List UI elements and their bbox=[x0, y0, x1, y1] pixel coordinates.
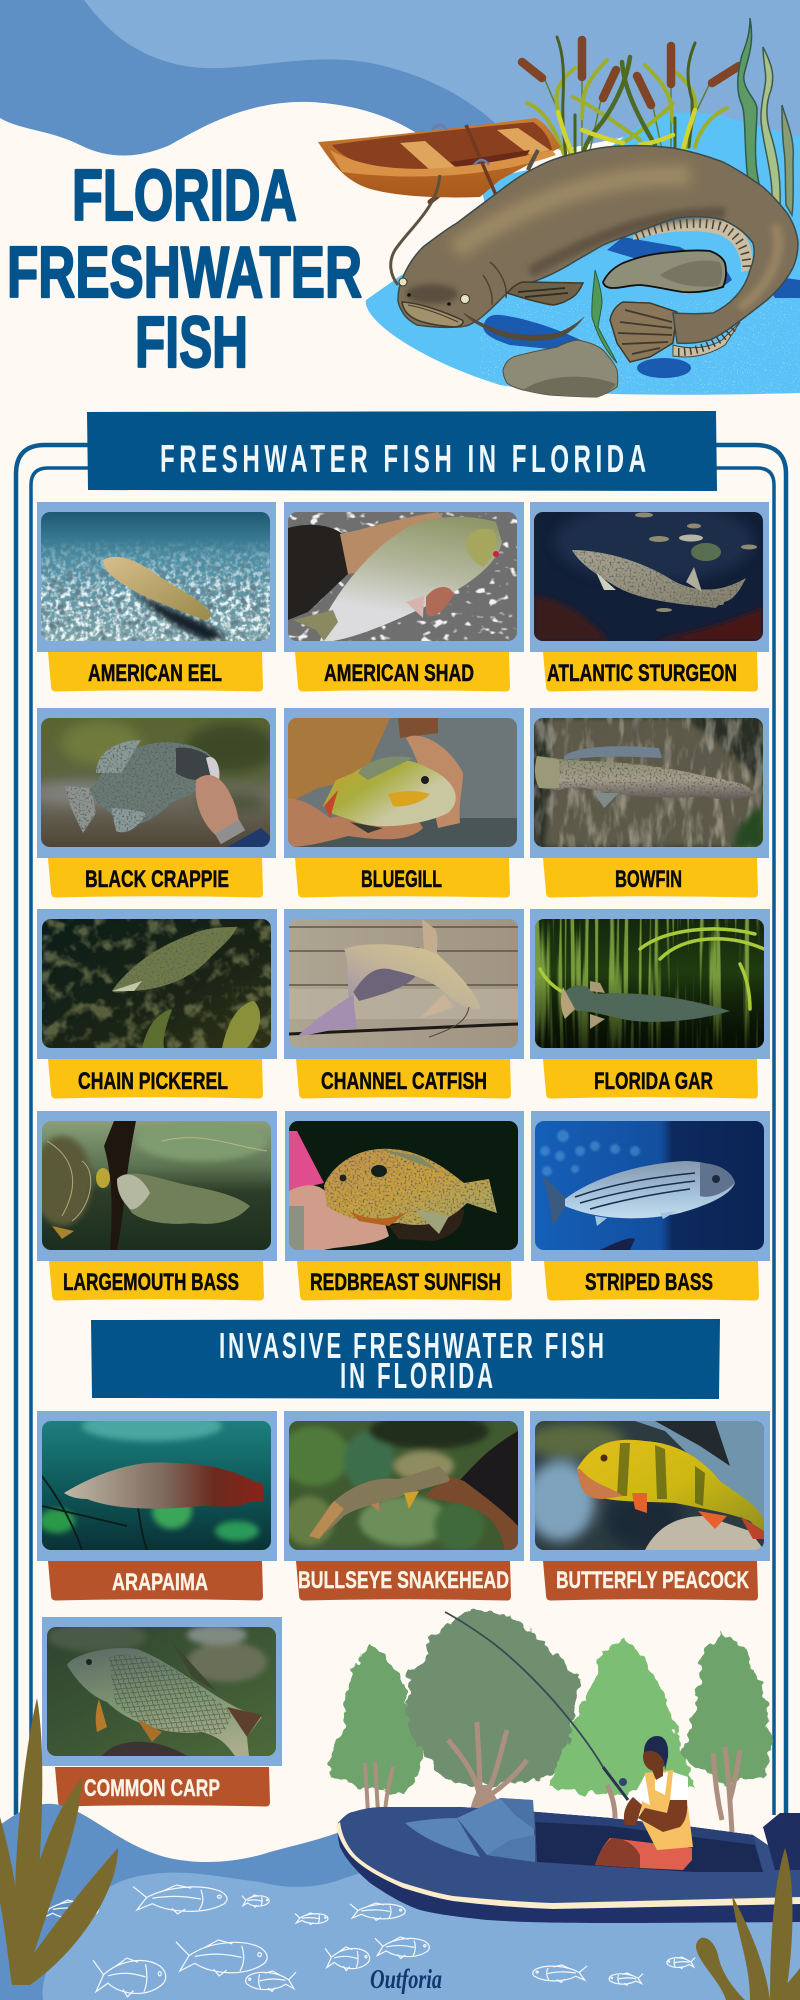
tile: Common carp bbox=[42, 1617, 282, 1807]
label: Bowfin: BOWFIN bbox=[615, 866, 682, 893]
tile: Channel catfish bbox=[284, 909, 524, 1099]
label: American eel bbox=[48, 652, 263, 692]
frame bbox=[16, 445, 786, 1815]
photo: Bowfin bbox=[534, 718, 763, 847]
tile: Butterfly peacock bbox=[525, 1411, 770, 1601]
photo: Bluegill bbox=[288, 718, 517, 847]
label: American shad: AMERICAN SHAD bbox=[324, 660, 474, 687]
photo: Black crappie bbox=[31, 718, 276, 847]
label: Striped bass bbox=[544, 1261, 759, 1301]
tile: Atlantic sturgeon bbox=[530, 502, 769, 692]
tile: Striped bass bbox=[531, 1111, 770, 1301]
fishing rod bbox=[445, 1612, 628, 1800]
photo: Channel catfish bbox=[289, 919, 518, 1048]
photo: Striped bass bbox=[535, 1121, 764, 1250]
title: FRESHWATER bbox=[7, 233, 362, 313]
tile: Arapaima bbox=[37, 1411, 277, 1601]
tile: Florida gar bbox=[530, 909, 770, 1099]
header illustration: waves bbox=[0, 0, 800, 156]
icon: wooden rowboat bbox=[318, 118, 561, 202]
tile: American shad bbox=[284, 502, 524, 692]
label: Black crappie bbox=[48, 858, 263, 898]
tile: Chain pickerel bbox=[37, 909, 277, 1099]
label: American shad bbox=[295, 652, 510, 692]
heading banner: Freshwater fish in Florida: FRESHWATER FISH IN FLORIDA bbox=[160, 437, 646, 480]
photo: Butterfly peacock bbox=[525, 1421, 764, 1551]
heading banner: Invasive freshwater fish in Florida: INVASIVE FRESHWATER FISH bbox=[219, 1327, 604, 1366]
label: Redbreast sunfish bbox=[297, 1261, 512, 1301]
tile: Redbreast sunfish bbox=[285, 1111, 524, 1301]
label: Bluegill bbox=[295, 858, 510, 898]
photo: Atlantic sturgeon bbox=[534, 502, 763, 641]
heading banner: Invasive freshwater fish in Florida: IN FLORIDA bbox=[340, 1357, 493, 1396]
label: Arapaima bbox=[48, 1561, 263, 1601]
label: Largemouth bass bbox=[49, 1261, 264, 1301]
label: Arapaima: ARAPAIMA bbox=[112, 1569, 208, 1596]
label: Chain pickerel bbox=[48, 1059, 263, 1099]
label: Atlantic sturgeon bbox=[543, 652, 758, 692]
label: Largemouth bass: LARGEMOUTH BASS bbox=[63, 1269, 239, 1296]
label: Redbreast sunfish: REDBREAST SUNFISH bbox=[310, 1269, 501, 1296]
icon: fishing boat bbox=[336, 1798, 800, 1923]
photo: American eel bbox=[41, 512, 270, 641]
bottom water waves bbox=[0, 1804, 800, 2000]
label: Butterfly peacock bbox=[543, 1561, 758, 1601]
tile: Bluegill bbox=[284, 708, 524, 898]
title: FISH bbox=[135, 303, 248, 383]
title: FLORIDA bbox=[72, 156, 297, 236]
photo: Common carp bbox=[47, 1622, 276, 1756]
label: Channel catfish bbox=[296, 1059, 511, 1099]
title bbox=[7, 156, 362, 383]
logo: Outforia: Outforia bbox=[370, 1964, 442, 1994]
label: Bullseye snakehead: BULLSEYE SNAKEHEAD bbox=[298, 1567, 509, 1594]
heading banner: Invasive freshwater fish in Florida bbox=[91, 1319, 720, 1399]
icon: trees bbox=[330, 1609, 771, 1832]
icon: cattails and reeds bbox=[522, 18, 793, 215]
icon: water plants left bbox=[0, 1698, 118, 1985]
label: Common carp: COMMON CARP bbox=[84, 1775, 220, 1802]
photo: Bullseye snakehead bbox=[289, 1421, 518, 1550]
icon: water plants right bbox=[696, 1848, 800, 2000]
icon: rocks and leaf bbox=[503, 250, 726, 397]
label: Black crappie: BLACK CRAPPIE bbox=[85, 866, 229, 893]
label: Bluegill: BLUEGILL bbox=[361, 866, 442, 893]
label: Chain pickerel: CHAIN PICKEREL bbox=[78, 1068, 228, 1095]
tile: Black crappie bbox=[31, 708, 276, 898]
label: Common carp bbox=[55, 1767, 270, 1807]
photo: Redbreast sunfish bbox=[289, 1121, 518, 1250]
icon: fisherman bbox=[595, 1736, 693, 1870]
label: Bowfin bbox=[543, 858, 758, 898]
photo: Chain pickerel bbox=[42, 919, 271, 1048]
label: Florida gar: FLORIDA GAR bbox=[594, 1068, 713, 1095]
heading banner: Freshwater fish in Florida bbox=[87, 411, 717, 491]
tile: Bowfin bbox=[530, 708, 769, 898]
label: Striped bass: STRIPED BASS bbox=[585, 1269, 713, 1296]
photo: American shad bbox=[288, 512, 517, 641]
photo: Largemouth bass bbox=[32, 1121, 271, 1250]
tile: Largemouth bass bbox=[32, 1111, 277, 1301]
label: American eel: AMERICAN EEL bbox=[88, 660, 222, 687]
label: Florida gar bbox=[543, 1059, 758, 1099]
label: Channel catfish: CHANNEL CATFISH bbox=[321, 1068, 487, 1095]
photo: Florida gar bbox=[535, 919, 764, 1048]
tile: Bullseye snakehead bbox=[279, 1411, 524, 1601]
photo: Arapaima bbox=[39, 1411, 271, 1550]
icon: catfish bbox=[391, 146, 798, 362]
icon: swimming fish outlines bbox=[41, 1885, 695, 1997]
tile: American eel bbox=[37, 502, 276, 692]
label: Bullseye snakehead bbox=[296, 1561, 511, 1601]
pond bbox=[366, 113, 800, 395]
